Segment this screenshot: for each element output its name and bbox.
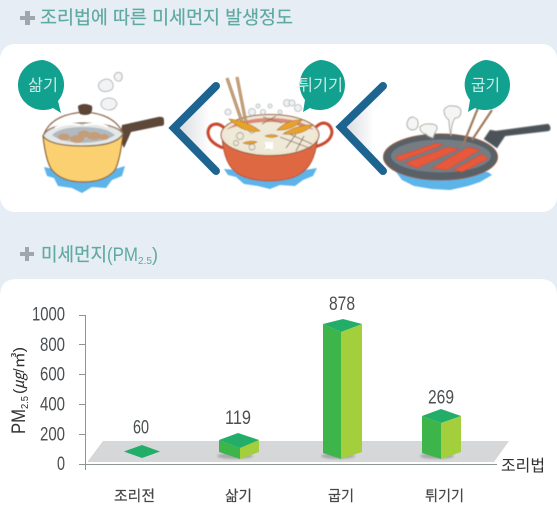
icon: plus [20,247,34,261]
icon: boiling pot [43,72,164,193]
bar: boiling 119: 119 [225,408,251,429]
x axis labels [114,488,464,505]
heading: fine dust: 미세먼지 [41,244,107,265]
y axis tick labels: 200 [40,424,65,446]
floor [88,441,509,462]
bar: before cooking 60: 60 [133,418,149,438]
y axis tick labels: 1000 [32,304,65,326]
callout: boiling [18,60,64,113]
callout: frying [298,60,345,112]
x axis labels: 삶기 [225,488,252,505]
y axis tick labels [32,304,65,475]
heading: fine dust: ) [152,245,158,266]
y axis tick labels: 400 [40,394,65,416]
panel: cooking methods [0,44,557,212]
y axis title: (㎍/㎥) [11,347,28,394]
y axis title [9,347,31,434]
callout: frying: 튀기기 [298,76,343,94]
callout: boiling: 삶기 [28,76,58,94]
icon: frying pot [208,77,332,189]
bar: grilling 878 [321,294,362,459]
x axis title: 조리법 [501,457,545,475]
callout: grilling [465,60,510,112]
arrow: less than 2 [341,86,383,171]
y axis tick labels: 600 [40,364,65,386]
y axis title: PM [9,409,30,434]
bar: grilling 878: 878 [329,294,355,315]
panel: chart [0,279,557,517]
bar chart: PM2.5 by cooking method [9,294,545,505]
heading: cooking method: 조리법에 따른 미세먼지 발생정도 [40,7,293,28]
bar: boiling 119 [217,408,259,459]
x axis labels: 튀기기 [425,488,464,505]
y axis title: 2.5 [20,396,31,409]
arrow: less than 1 [174,86,216,171]
bar: before cooking 60 [124,418,160,458]
heading: fine dust: 2.5 [138,256,152,267]
x axis labels: 조리전 [114,488,155,505]
heading: fine dust: (PM [107,245,138,266]
bar: frying 269: 269 [428,388,454,408]
icon: plus [20,11,35,25]
callout: grilling: 굽기 [471,76,500,94]
heading: fine dust [20,244,158,267]
y axis tick labels: 800 [40,334,65,356]
bar: frying 269 [420,388,461,459]
y axis tick labels: 0 [57,453,65,475]
x axis labels: 굽기 [328,488,354,505]
icon: frying pan [384,106,550,190]
